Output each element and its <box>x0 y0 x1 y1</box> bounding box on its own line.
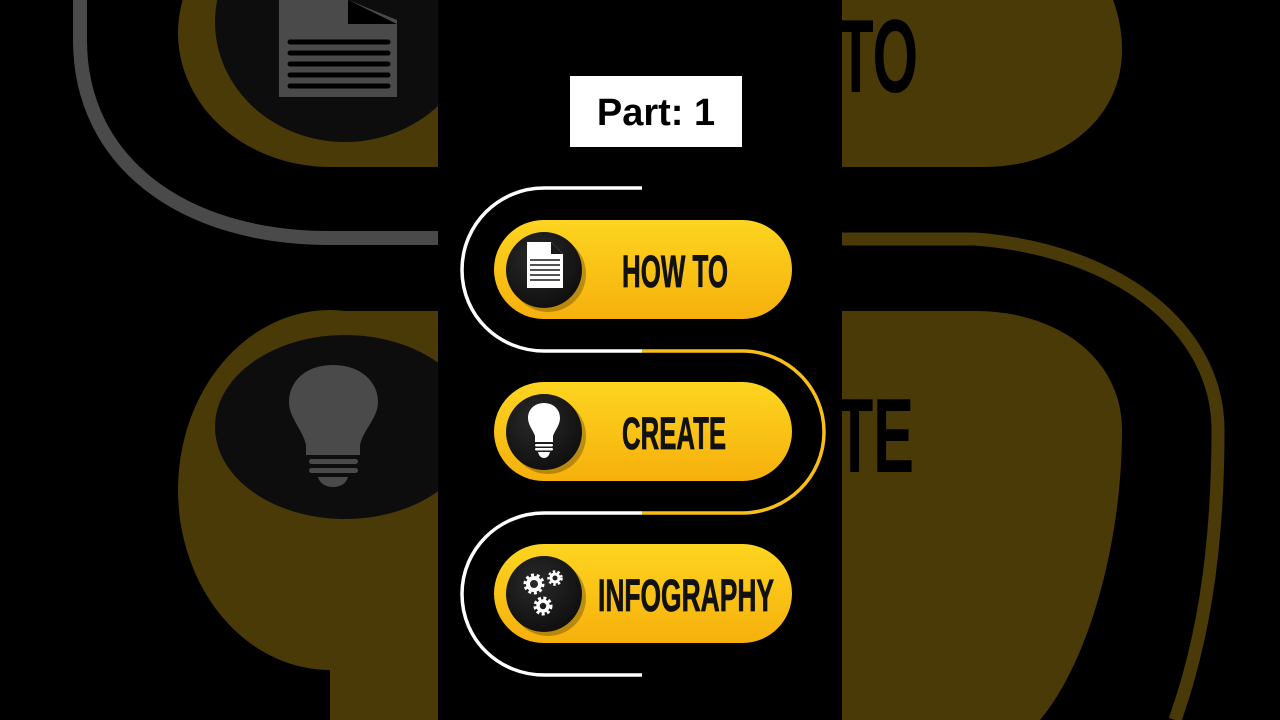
icon: gears <box>525 572 562 614</box>
background left: blurred enlarged copy <box>80 0 482 720</box>
pill 1: HOW TO: HOW TO <box>622 246 728 297</box>
background right: blurred enlarged copy: TO <box>838 0 918 115</box>
pill 2: CREATE: CREATE <box>622 408 726 459</box>
icon: document <box>527 242 563 288</box>
connector lines <box>462 188 824 675</box>
pill 3: INFOGRAPHY <box>494 544 792 643</box>
pill 1: HOW TO <box>494 220 792 319</box>
icon: light bulb <box>528 403 560 458</box>
title box: Part 1 <box>570 76 742 147</box>
title box: Part 1: Part: 1 <box>597 92 715 134</box>
background right: blurred enlarged copy: TE <box>836 377 914 495</box>
pill 2: CREATE <box>494 382 792 481</box>
background right: blurred enlarged copy <box>836 0 1218 720</box>
pill 3: INFOGRAPHY: INFOGRAPHY <box>598 570 774 621</box>
